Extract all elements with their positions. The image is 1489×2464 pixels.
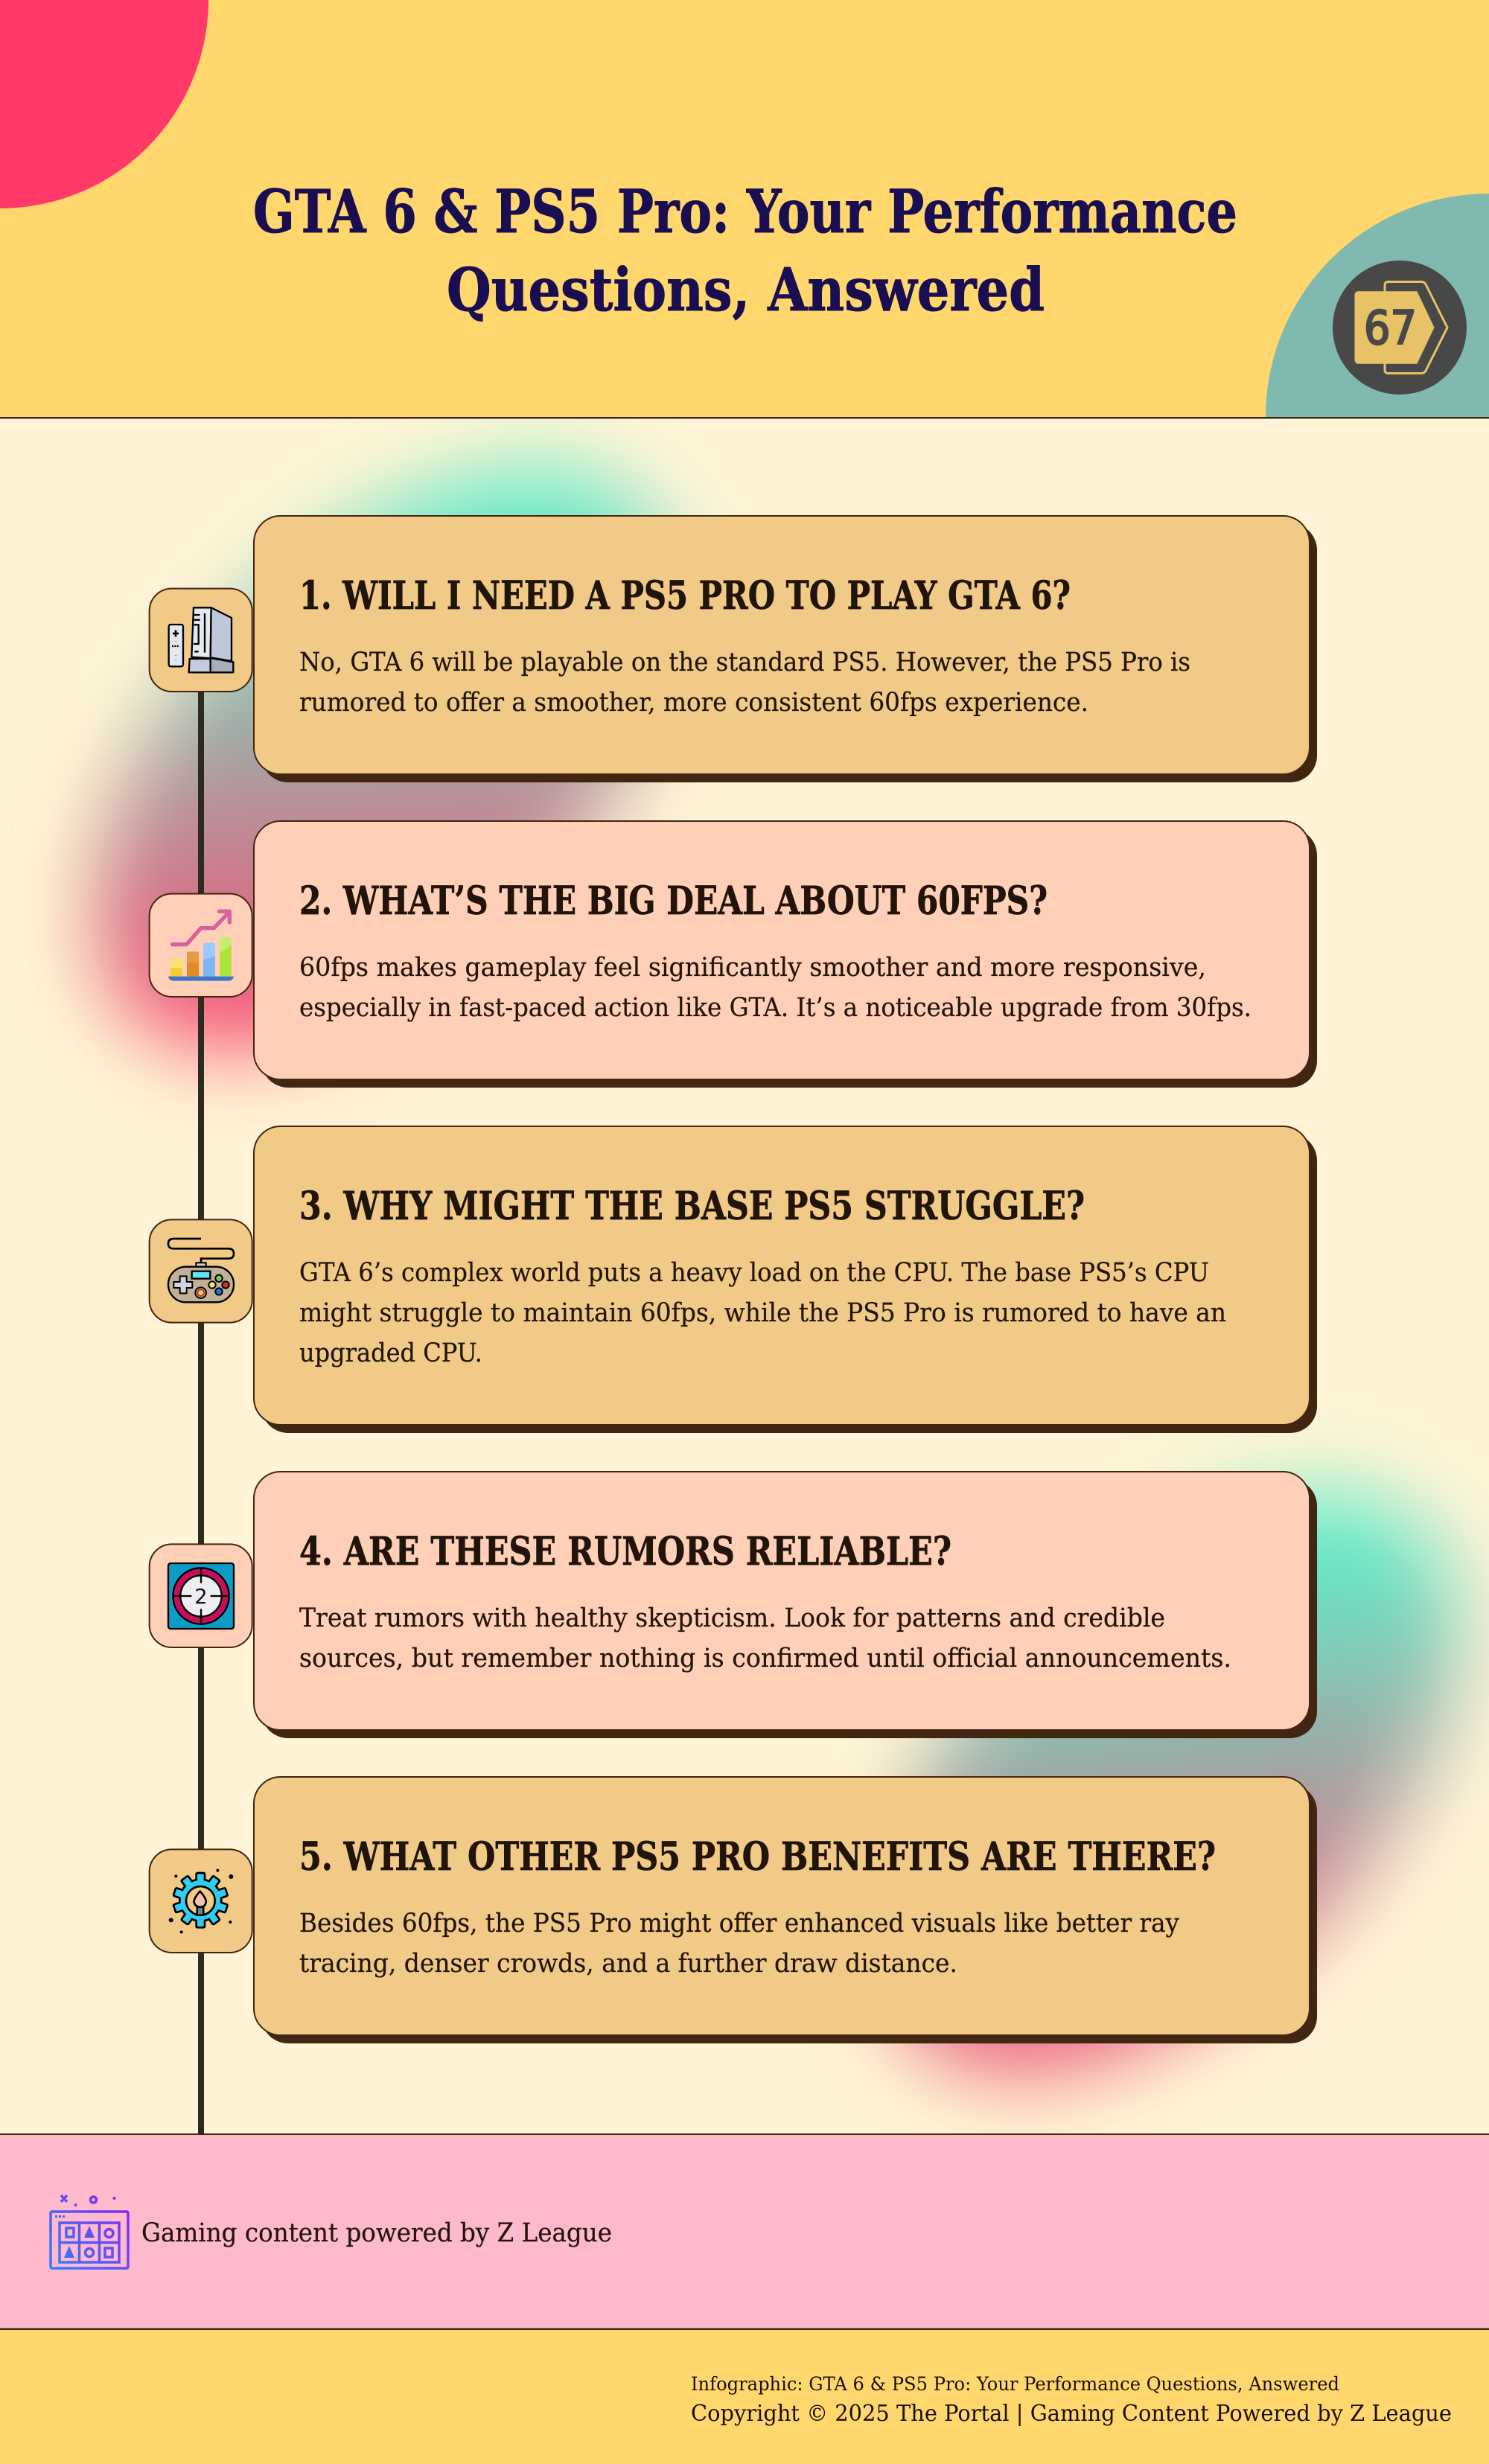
card 3 body: GTA 6’s complex world puts a heavy load on the CPU. The base PS5’s CPU <box>299 1258 1209 1288</box>
icon: countdown number 2 <box>150 1544 252 1647</box>
card 4 heading: 4. ARE THESE RUMORS RELIABLE? <box>299 1529 951 1574</box>
timeline vertical line <box>198 640 204 2133</box>
card 4 body: Treat rumors with healthy skepticism. Look for patterns and credible <box>299 1603 1165 1633</box>
title: GTA 6 & PS5 Pro: Your Performance <box>253 176 1237 246</box>
icon: gear with flame <box>150 1849 252 1953</box>
sponsor text: Gaming content powered by Z League <box>141 2218 612 2248</box>
footer copyright line: Copyright © 2025 The Portal | Gaming Content Powered by Z League <box>691 2401 1452 2427</box>
panel: card 3 <box>254 1126 1317 1433</box>
card 3 body: might struggle to maintain 60fps, while the PS5 Pro is rumored to have an <box>299 1298 1226 1328</box>
panel: footer <box>0 2330 1489 2464</box>
decorative gradient blobs <box>0 365 1489 2177</box>
card 3 body: upgraded CPU. <box>299 1338 482 1368</box>
teal corner circle <box>1266 194 1489 417</box>
card 3 heading: 3. WHY MIGHT THE BASE PS5 STRUGGLE? <box>299 1184 1085 1229</box>
panel: card 4 <box>254 1472 1317 1738</box>
card 2 body <box>299 953 1252 1023</box>
logo badge 67: 67 <box>1364 301 1417 355</box>
title: Questions, Answered <box>447 255 1045 325</box>
icon: game controller <box>150 1219 252 1323</box>
panel: sponsor band <box>0 2133 1489 2330</box>
card 4 body: sources, but remember nothing is confirmed until official announcements. <box>299 1644 1231 1673</box>
card 2 heading: 2. WHAT’S THE BIG DEAL ABOUT 60FPS? <box>299 878 1048 924</box>
icon: gaming grid window <box>51 2195 128 2268</box>
card 2 body: especially in fast-paced action like GTA. It’s a noticeable upgrade from 30fps. <box>299 993 1252 1023</box>
panel: card 2 <box>254 821 1317 1088</box>
card 1 heading: 1. WILL I NEED A PS5 PRO TO PLAY GTA 6? <box>299 573 1071 619</box>
icon: countdown number 2: 2 <box>194 1586 208 1609</box>
card 5 body: Besides 60fps, the PS5 Pro might offer enhanced visuals like better ray <box>299 1909 1179 1938</box>
card 1 body: No, GTA 6 will be playable on the standard PS5. However, the PS5 Pro is <box>299 648 1190 677</box>
card 4 body <box>299 1603 1231 1673</box>
logo badge 67 <box>1333 261 1467 395</box>
panel: card 5 <box>254 1777 1317 2043</box>
pink corner circle <box>0 0 208 208</box>
footer credit line: Infographic: GTA 6 & PS5 Pro: Your Performance Questions, Answered <box>691 2373 1339 2395</box>
card 3 body <box>299 1258 1226 1368</box>
card 1 body <box>299 648 1190 718</box>
icon: console and remote <box>150 589 252 692</box>
title <box>253 176 1237 325</box>
panel: header <box>0 0 1489 418</box>
panel: card 1 <box>254 516 1317 782</box>
card 5 heading: 5. WHAT OTHER PS5 PRO BENEFITS ARE THERE? <box>299 1834 1216 1880</box>
icon: rising bar chart <box>150 894 252 997</box>
card 5 body: tracing, denser crowds, and a further draw distance. <box>299 1949 957 1979</box>
card 5 body <box>299 1909 1179 1979</box>
card 1 body: rumored to offer a smoother, more consistent 60fps experience. <box>299 688 1088 718</box>
card 2 body: 60fps makes gameplay feel significantly smoother and more responsive, <box>299 953 1206 983</box>
